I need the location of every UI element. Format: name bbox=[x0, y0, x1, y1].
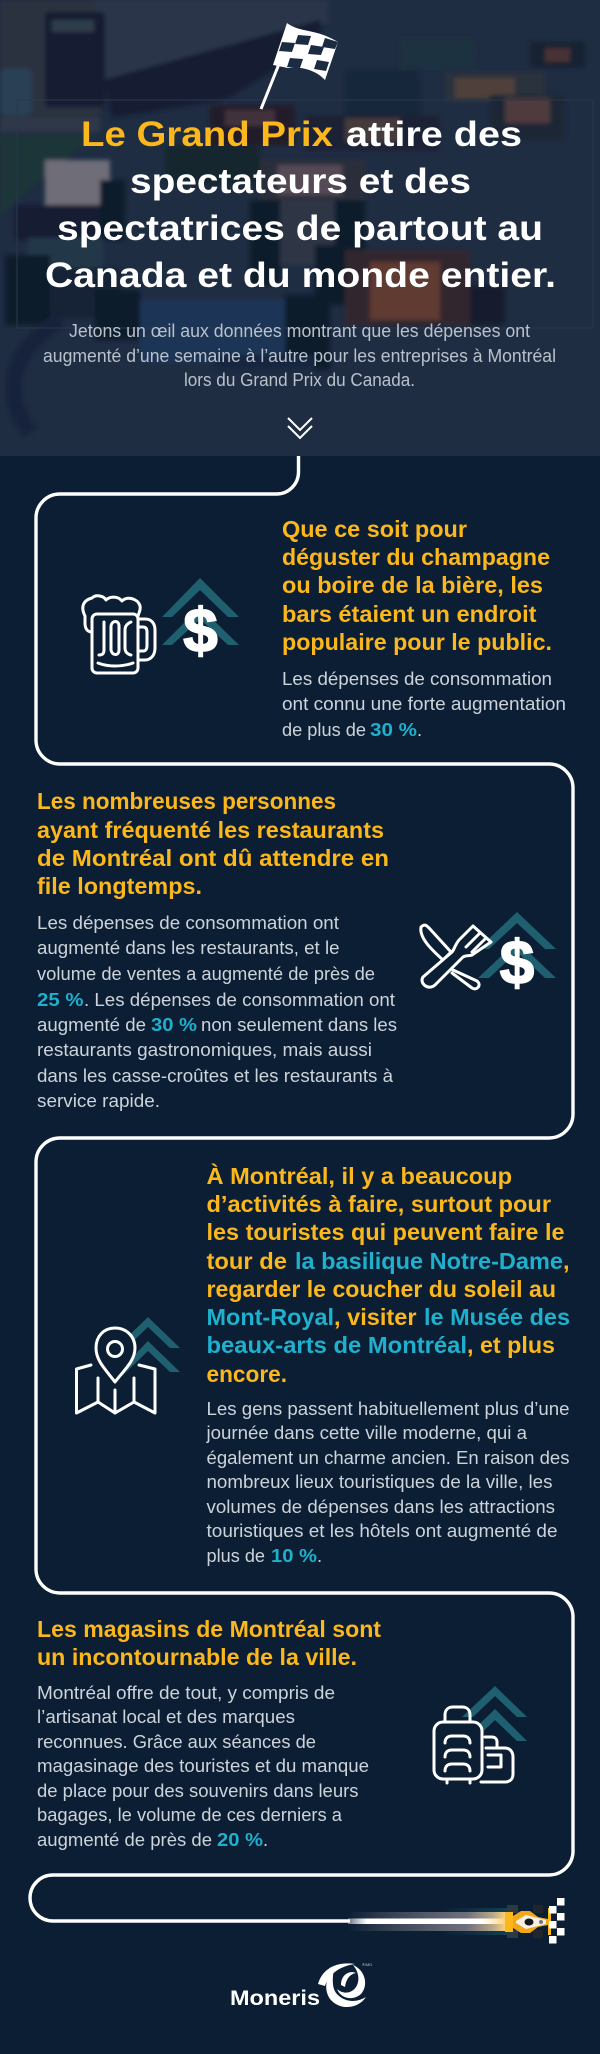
heading: regarder le coucher du soleil au bbox=[206, 1276, 556, 1302]
icon: map pin with rising chevrons bbox=[76, 1317, 180, 1413]
icon: double chevron down bbox=[288, 418, 312, 438]
header panel: race photo with title bbox=[0, 0, 600, 456]
intro paragraph bbox=[43, 320, 556, 390]
heading: encore. bbox=[206, 1361, 287, 1387]
heading: Les magasins de Montréal sont bbox=[37, 1616, 381, 1642]
heading: , visiter bbox=[334, 1304, 416, 1330]
body text bbox=[205, 1398, 569, 1566]
Moneris logo: ®/MD bbox=[362, 1962, 372, 1967]
body text: augmenté de près de bbox=[37, 1829, 212, 1850]
body text: bagages, le volume de ces derniers a bbox=[37, 1804, 343, 1825]
body text: journée dans cette ville moderne, qui a bbox=[205, 1422, 528, 1443]
icon: luggage with rising chevrons bbox=[434, 1686, 527, 1783]
intro paragraph: lors du Grand Prix du Canada. bbox=[184, 369, 415, 390]
icon: checkered flag bbox=[261, 23, 338, 109]
body text: Les dépenses de consommation ont bbox=[37, 912, 339, 933]
checkered finish line bbox=[549, 1898, 564, 1944]
race car at finish line bbox=[348, 1898, 564, 1944]
speed trail bbox=[348, 1908, 510, 1935]
body text bbox=[37, 1682, 369, 1850]
body text: 20 % bbox=[217, 1829, 263, 1850]
body text: augmenté dans les restaurants, et le bbox=[37, 937, 340, 958]
heading: de Montréal ont dû attendre en bbox=[37, 845, 389, 871]
heading: les touristes qui peuvent faire le bbox=[206, 1219, 564, 1245]
title: spectatrices de partout au bbox=[57, 209, 543, 248]
body text: . bbox=[263, 1829, 268, 1850]
body text: Les dépenses de consommation bbox=[282, 668, 552, 689]
heading bbox=[37, 788, 389, 899]
heading: , bbox=[563, 1248, 570, 1274]
heading: À Montréal, il y a beaucoup bbox=[206, 1162, 512, 1189]
panel: bars bbox=[36, 494, 573, 764]
body text: restaurants gastronomiques, mais aussi bbox=[37, 1039, 372, 1060]
heading: beaux-arts de Montréal bbox=[206, 1332, 467, 1358]
heading: un incontournable de la ville. bbox=[37, 1644, 357, 1670]
heading: la basilique Notre-Dame bbox=[295, 1248, 563, 1274]
heading: Que ce soit pour bbox=[282, 516, 467, 542]
title: Canada et du monde entier. bbox=[45, 256, 556, 295]
body text: 30 % bbox=[370, 719, 417, 740]
title: attire des bbox=[346, 115, 522, 154]
car bbox=[505, 1905, 551, 1938]
body text: 10 % bbox=[271, 1545, 317, 1566]
title: Le Grand Prix bbox=[81, 115, 334, 154]
heading: , et plus bbox=[467, 1332, 555, 1358]
heading: le Musée des bbox=[424, 1304, 570, 1330]
body text: magasinage des touristes et du manque bbox=[37, 1755, 369, 1776]
body text: 30 % bbox=[151, 1014, 197, 1035]
title bbox=[45, 115, 556, 295]
body text: reconnues. Grâce aux séances de bbox=[37, 1731, 316, 1752]
heading: populaire pour le public. bbox=[282, 629, 552, 655]
body text: service rapide. bbox=[37, 1090, 160, 1111]
body text: l’artisanat local et des marques bbox=[37, 1706, 295, 1727]
panel: tourism bbox=[36, 1138, 573, 1593]
body text: touristiques et les hôtels ont augmenté de bbox=[206, 1520, 558, 1541]
icon: beer mug with rising dollar: $ bbox=[183, 597, 218, 666]
heading: file longtemps. bbox=[37, 873, 202, 899]
race photo background bbox=[0, 0, 600, 456]
intro paragraph: augmenté d’une semaine à l’autre pour les entreprises à Montréal bbox=[43, 345, 556, 366]
icon: cutlery with rising dollar: $ bbox=[500, 929, 534, 998]
heading: Les nombreuses personnes bbox=[37, 788, 336, 814]
heading: ou boire de la bière, les bbox=[282, 572, 543, 598]
heading: ayant fréquenté les restaurants bbox=[37, 817, 384, 843]
body text: également un charme ancien. En raison des bbox=[206, 1447, 570, 1468]
body text: Les gens passent habituellement plus d’une bbox=[206, 1398, 570, 1419]
body text bbox=[37, 912, 397, 1111]
body text: non seulement dans les bbox=[201, 1014, 397, 1035]
Moneris logo: Moneris bbox=[230, 1986, 320, 2010]
intro paragraph: Jetons un œil aux données montrant que les dépenses ont bbox=[69, 320, 530, 341]
body text: volumes de dépenses dans les attractions bbox=[206, 1496, 555, 1517]
heading: déguster du champagne bbox=[282, 544, 550, 570]
title: spectateurs et des bbox=[130, 162, 471, 201]
body text: . Les dépenses de consommation ont bbox=[84, 989, 395, 1010]
body text: volume de ventes a augmenté de près de bbox=[37, 963, 375, 984]
icon: beer mug with rising dollar bbox=[83, 578, 239, 673]
body text: de plus de bbox=[282, 719, 366, 740]
body text: nombreux lieux touristiques de la ville, les bbox=[206, 1471, 552, 1492]
heading: Mont-Royal bbox=[206, 1304, 334, 1330]
body text: . bbox=[317, 1545, 322, 1566]
body text: augmenté de bbox=[37, 1014, 146, 1035]
body text: 25 % bbox=[37, 989, 84, 1010]
body text: ont connu une forte augmentation bbox=[282, 693, 566, 714]
body text: de place pour des souvenirs dans leurs bbox=[37, 1780, 358, 1801]
body text: Montréal offre de tout, y compris de bbox=[37, 1682, 335, 1703]
body text bbox=[282, 668, 566, 740]
heading bbox=[206, 1162, 570, 1387]
heading: tour de bbox=[206, 1248, 287, 1274]
heading bbox=[282, 516, 552, 655]
heading bbox=[37, 1616, 381, 1670]
Moneris logo bbox=[230, 1962, 372, 2010]
heading: d’activités à faire, surtout pour bbox=[206, 1191, 551, 1217]
body text: plus de bbox=[206, 1545, 265, 1566]
winding track line bbox=[30, 456, 573, 1921]
body text: . bbox=[417, 719, 422, 740]
panel: shops bbox=[30, 1593, 573, 1875]
icon: cutlery with rising dollar bbox=[421, 912, 556, 998]
panel: restaurants bbox=[36, 764, 573, 1138]
body text: dans les casse-croûtes et les restaurants à bbox=[37, 1065, 394, 1086]
heading: bars étaient un endroit bbox=[282, 601, 537, 627]
